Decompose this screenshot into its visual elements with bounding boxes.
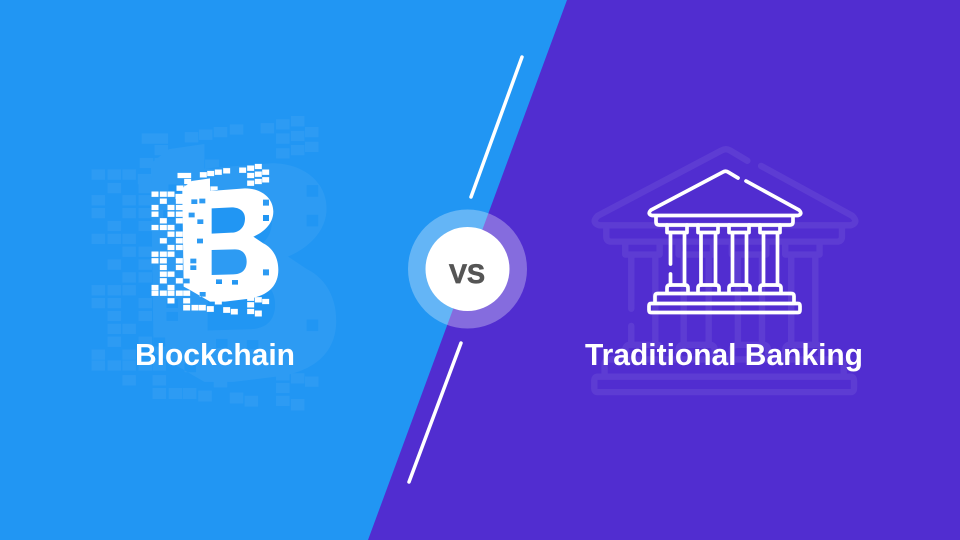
badge inner circle: [426, 227, 510, 311]
icon: faint oversized bank building: [594, 149, 855, 392]
icon: faint oversized blockchain logo: [93, 117, 336, 410]
badge label: VS: [449, 259, 485, 289]
divider line: upper: [471, 57, 522, 197]
icon: bank building: [649, 171, 801, 312]
icon: blockchain logo: [152, 164, 278, 316]
versus badge: [408, 210, 527, 328]
heading: Traditional Banking: Traditional Banking: [585, 337, 863, 372]
heading: Blockchain: Blockchain: [135, 337, 295, 372]
badge halo ring: [408, 210, 527, 328]
panel: traditional banking background: [368, 0, 960, 540]
divider line: lower: [409, 343, 461, 482]
